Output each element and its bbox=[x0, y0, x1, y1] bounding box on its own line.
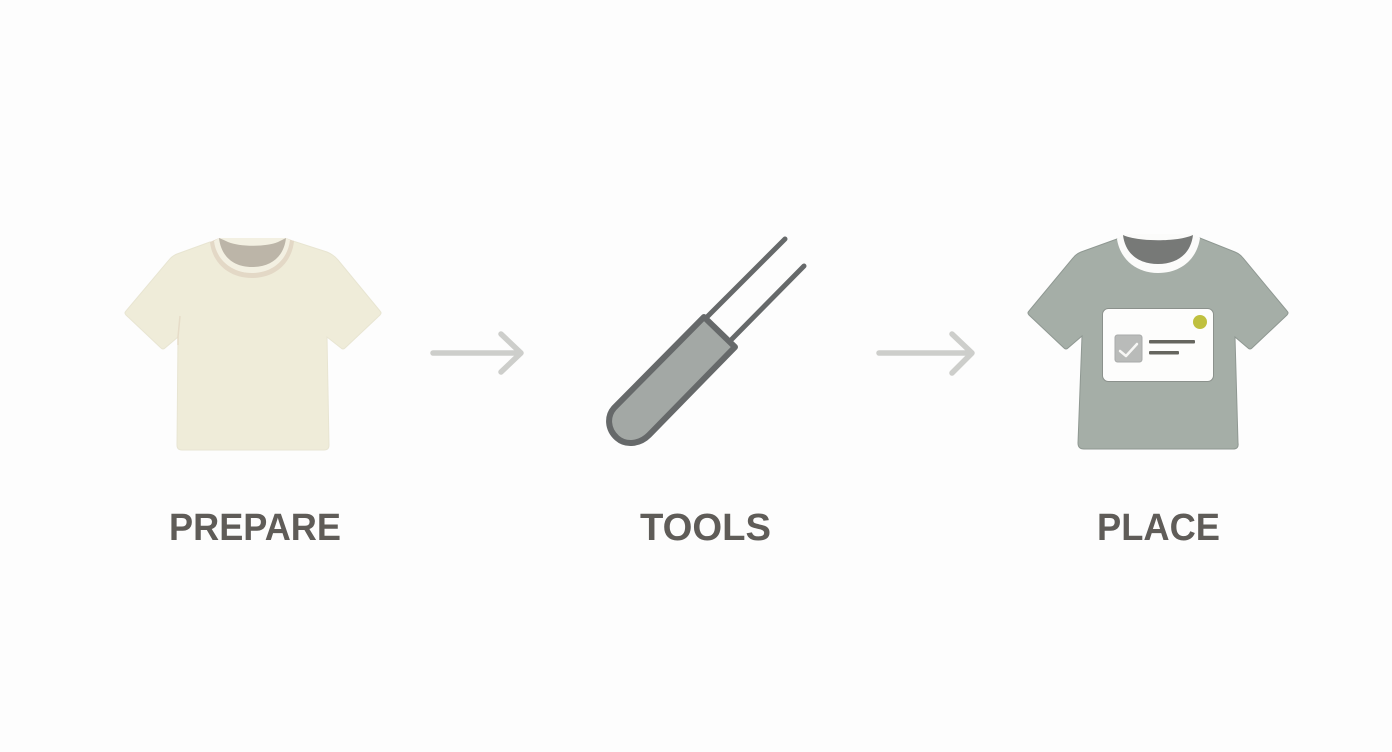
sticker card bbox=[1102, 308, 1214, 382]
checkbox bbox=[1115, 335, 1142, 362]
icon: two-pronged tool bbox=[609, 239, 804, 443]
step 2: tools bbox=[609, 239, 804, 549]
arrow: tools to place bbox=[879, 334, 972, 373]
icon: plain cream t-shirt bbox=[125, 238, 381, 450]
collar bbox=[1117, 234, 1200, 273]
label: PREPARE: PREPARE bbox=[169, 507, 341, 549]
text lines bbox=[1149, 340, 1195, 354]
label: TOOLS: TOOLS bbox=[640, 507, 771, 549]
collar bbox=[210, 238, 294, 278]
icon: grey t-shirt with placed label bbox=[1028, 234, 1288, 449]
step 1: prepare bbox=[125, 238, 381, 549]
yellow-green dot bbox=[1193, 315, 1207, 329]
label: PLACE: PLACE bbox=[1097, 507, 1220, 549]
arrow: prepare to tools bbox=[433, 334, 521, 372]
step 3: place bbox=[1028, 234, 1288, 549]
